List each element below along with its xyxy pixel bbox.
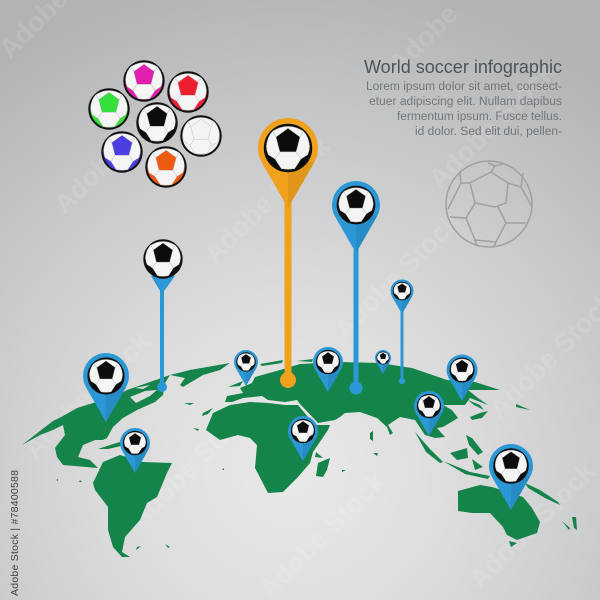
greenland [170,363,230,387]
ball: magenta [124,61,164,101]
title: World soccer infographic [364,56,562,77]
stem base dot [350,382,362,394]
watermark: Adobe Stock [328,206,467,344]
body text: etuer adipiscing elit. Nullam dapibus [369,94,562,108]
stem base dot [157,382,167,392]
pin stem [160,285,164,387]
map pin: southeast asia [414,391,444,436]
small islands [56,359,530,550]
papua [525,483,560,505]
sumatra and java [415,432,443,463]
map pin: australia [489,444,533,510]
ball: black [137,103,177,143]
body text [366,79,562,138]
map pin: siberia small [375,350,391,374]
small blue pin on stem [390,279,414,384]
pin stem [284,195,292,380]
stem base dot [399,378,405,384]
ball: red [168,72,208,112]
map pin: north america [83,353,129,422]
watermark: Adobe Stock [48,81,187,219]
map pin: east africa [288,416,318,461]
sulawesi [472,459,483,470]
stem base dot [280,372,296,388]
africa [206,402,330,493]
outline soccer ball [446,161,532,247]
ball: green [89,89,129,129]
borneo [450,448,468,460]
ball: blue [102,132,142,172]
japan and korea [468,400,488,420]
tall orange pin [258,118,318,388]
pin stem [354,245,358,388]
watermark: Adobe Stock [198,131,337,269]
watermark: Adobe [383,0,464,79]
tasmania [509,541,517,547]
north america [22,375,170,468]
map pin: europe [234,350,258,386]
new zealand [562,521,570,530]
pin head [332,181,380,253]
map pin: china [446,354,478,401]
map pin: south america [120,428,150,473]
stock id: Adobe Stock | #78400588 [9,470,21,596]
pin cone [151,276,175,294]
philippines [466,435,483,455]
body text: fermentum ipsum. Fusce tellus. [397,109,562,123]
watermark: Adobe Stock [18,326,157,464]
australia [458,485,540,540]
ball: white [181,116,221,156]
map pin: russia [313,347,343,392]
ball with cone on stem [144,240,182,392]
colored soccer balls [89,61,221,187]
caribbean [98,442,121,449]
body text: Lorem ipsum dolor sit amet, consect- [366,79,562,93]
tall blue pin [332,181,380,394]
south america [93,455,172,557]
ball [144,240,182,278]
eurasia [225,362,500,438]
madagascar [316,458,330,477]
watermark: Adobe Stock [423,56,562,194]
ball: orange [146,147,186,187]
pin head [258,118,318,208]
pin stem [400,308,404,380]
watermark: Adobe Stock [123,396,262,534]
watermark: Adobe Stock [463,456,600,594]
body text: id dolor. Sed elit dui, pellen- [415,124,562,138]
pin head [390,279,414,314]
world map [22,359,577,557]
